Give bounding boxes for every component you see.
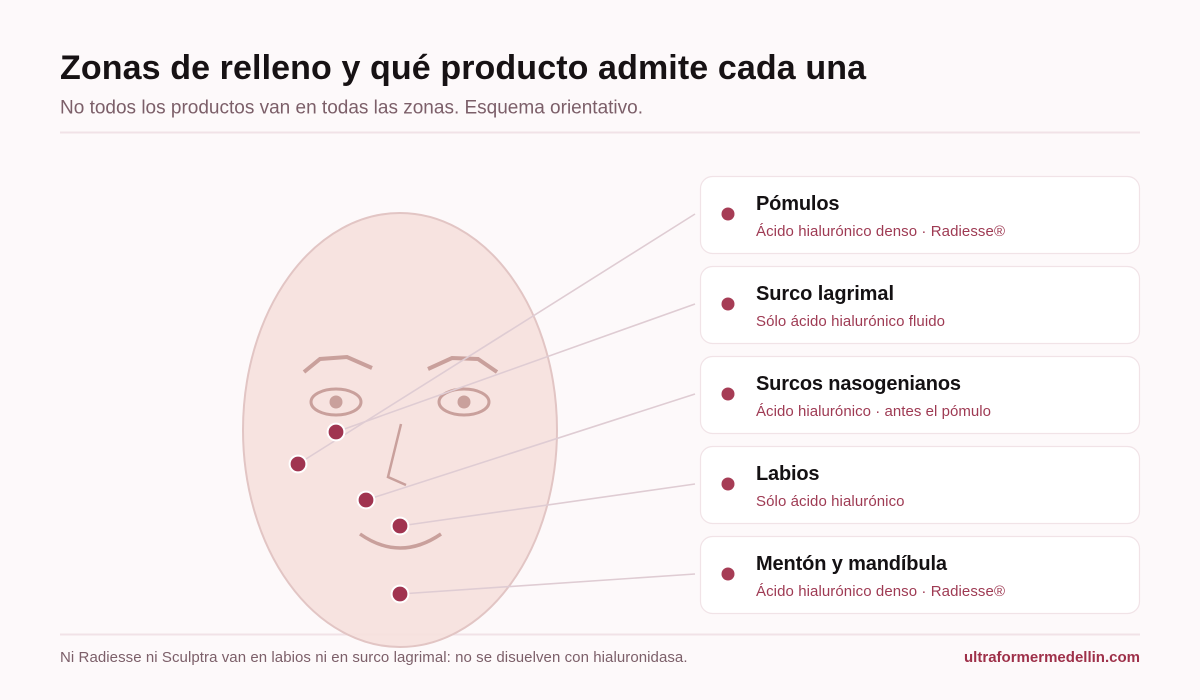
right eyebrow [428, 358, 497, 372]
card: Pómulos: Pómulos [756, 193, 840, 215]
connector lines [298, 214, 695, 594]
mouth [360, 534, 441, 548]
card: Surcos nasogenianos [700, 356, 1140, 434]
left eye [311, 389, 361, 415]
card: Mentón y mandíbula: Ácido hialurónico denso · Radiesse® [756, 583, 1005, 600]
card: Pómulos [700, 176, 1140, 254]
card: Labios: Labios [756, 463, 820, 485]
marker: labios [392, 518, 408, 534]
nose [388, 424, 406, 485]
left eyebrow [304, 357, 372, 372]
card: Mentón y mandíbula [700, 536, 1140, 614]
card: Surco lagrimal: Surco lagrimal [756, 283, 894, 305]
footer website: ultraformermedellin.com [964, 649, 1140, 666]
face outline [243, 213, 557, 647]
marker: pómulos [290, 456, 306, 472]
right eye [439, 389, 489, 415]
card: Pómulos: Ácido hialurónico denso · Radiesse® [756, 223, 1005, 240]
face diagram [243, 213, 695, 647]
card: Surco lagrimal: Sólo ácido hialurónico fluido [756, 313, 945, 330]
subtitle: No todos los productos van en todas las zonas. Esquema orientativo. [60, 98, 643, 118]
title: Zonas de relleno y qué producto admite cada una [60, 49, 867, 87]
card: Mentón y mandíbula: Mentón y mandíbula [756, 553, 948, 575]
card: Labios [700, 446, 1140, 524]
card: Surcos nasogenianos: Ácido hialurónico · antes el pómulo [756, 403, 991, 420]
marker: surco lagrimal [328, 424, 344, 440]
marker: surcos nasogenianos [358, 492, 374, 508]
card: Surcos nasogenianos: Surcos nasogenianos [756, 373, 961, 395]
card: Labios: Sólo ácido hialurónico [756, 493, 904, 510]
footer note: Ni Radiesse ni Sculptra van en labios ni en surco lagrimal: no se disuelven con hialuronidasa. [60, 649, 688, 666]
card: Surco lagrimal [700, 266, 1140, 344]
marker: mentón [392, 586, 408, 602]
